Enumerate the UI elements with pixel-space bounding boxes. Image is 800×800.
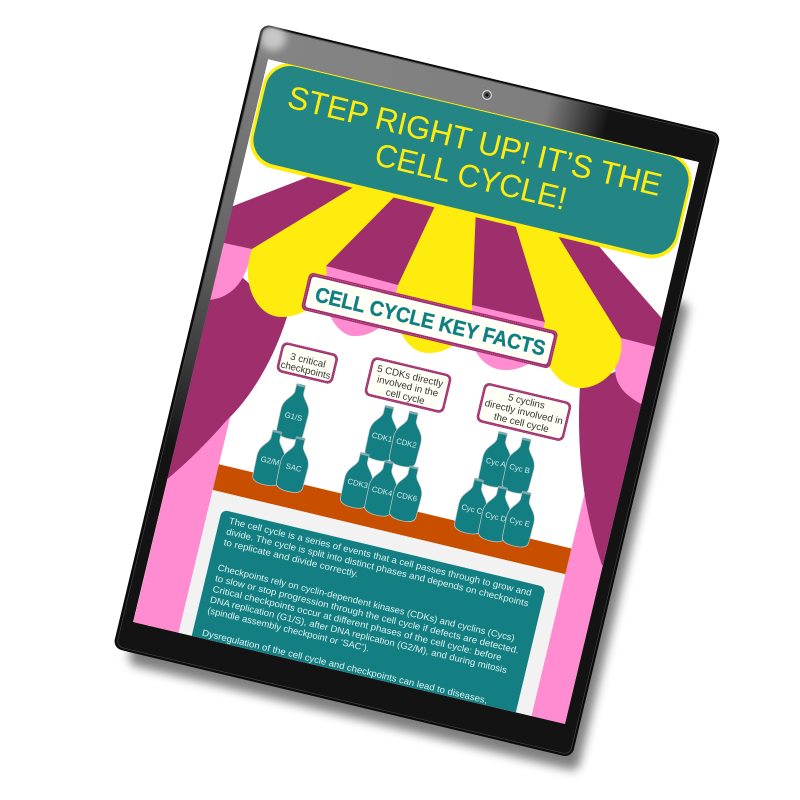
text block: paragraph two	[208, 564, 518, 673]
grey panel background	[178, 490, 565, 720]
sign: 5 CDKs: 5 CDKs directly	[376, 364, 444, 390]
text block: paragraph one: to replicate and divide correctly.	[223, 537, 359, 579]
title banner	[244, 57, 697, 264]
text block: paragraph two: DNA replication (G1/S), after DNA replication (G2/M), and during mitosis	[209, 595, 508, 675]
awning magenta fan	[223, 177, 662, 350]
bottles: checkpoints: G2/M	[260, 454, 280, 468]
left magenta curtain	[167, 258, 287, 479]
tablet screen	[130, 57, 710, 744]
awning pink scallops	[205, 241, 660, 410]
right magenta curtain	[579, 355, 653, 566]
text block: paragraph two: Critical checkpoints occur at different phases of the cell cycle: before	[212, 584, 503, 663]
sign: 5 cyclins: 5 cyclins	[507, 392, 546, 412]
bottles: cyclins	[454, 431, 535, 548]
bottles: cyclins: Cyc B	[508, 462, 531, 476]
orange shelf	[213, 464, 571, 574]
sign: 5 CDKs: cell cycle	[384, 387, 426, 407]
sign: 5 cyclins: directly involved in	[484, 398, 564, 427]
text block: paragraph two: Checkpoints rely on cyclin-dependent kinases (CDKs) and cyclins (Cycs)	[217, 562, 516, 643]
tablet body	[113, 22, 722, 758]
pink side columns	[132, 302, 643, 731]
text block: paragraph two: to slow or stop progression through the cell cycle if defects are detected.	[214, 573, 520, 655]
title banner: CELL CYCLE!	[372, 136, 571, 217]
bottles: CDKs: CDK6	[396, 490, 418, 504]
camera	[482, 90, 492, 100]
sign: 5 cyclins: the cell cycle	[493, 412, 550, 435]
title banner: STEP RIGHT UP! IT’S THE	[284, 79, 665, 203]
bottles: CDKs: CDK2	[395, 436, 418, 450]
sign: 5 CDKs: involved in the	[376, 374, 440, 400]
bottles: CDKs: CDK4	[371, 485, 394, 498]
panel: cell cycle description	[192, 510, 545, 712]
text block: paragraph three: Dysregulation of the cell cycle and checkpoints can lead to diseases,	[201, 628, 488, 705]
text block: paragraph one: The cell cycle is a series of events that a cell passes through to grow and	[228, 516, 533, 598]
bottles: cyclins: Cyc E	[508, 515, 531, 529]
sign: 3 critical checkpoints: checkpoints	[279, 359, 332, 382]
sign: 3 critical checkpoints: 3 critical	[289, 352, 327, 371]
bottles: checkpoints: SAC	[285, 461, 303, 474]
sign: 3 critical checkpoints	[276, 341, 339, 385]
bottles: cyclins: Cyc A	[485, 456, 508, 470]
bottles: CDKs: CDK1	[371, 431, 393, 444]
sign: 5 CDKs	[363, 356, 453, 414]
text block: paragraph one: divide. The cycle is split into distinct phases and depends on checkpoints	[225, 526, 530, 608]
text block: paragraph two: (spindle assembly checkpoint or ‘SAC’).	[207, 605, 370, 654]
sign: 5 cyclins	[475, 382, 572, 442]
sign: cell cycle key facts heading: CELL CYCLE KEY FACTS	[313, 283, 548, 361]
bottles: CDKs: CDK3	[347, 477, 369, 490]
bottles: cyclins: Cyc D	[484, 510, 507, 524]
tablet shadow	[127, 196, 690, 772]
bottles: cyclins: Cyc C	[460, 502, 484, 516]
bottles: checkpoints: G1/S	[284, 410, 303, 423]
awning yellow stripes	[248, 188, 622, 388]
bottles: checkpoints	[252, 384, 309, 493]
bottles: CDKs	[340, 405, 422, 522]
